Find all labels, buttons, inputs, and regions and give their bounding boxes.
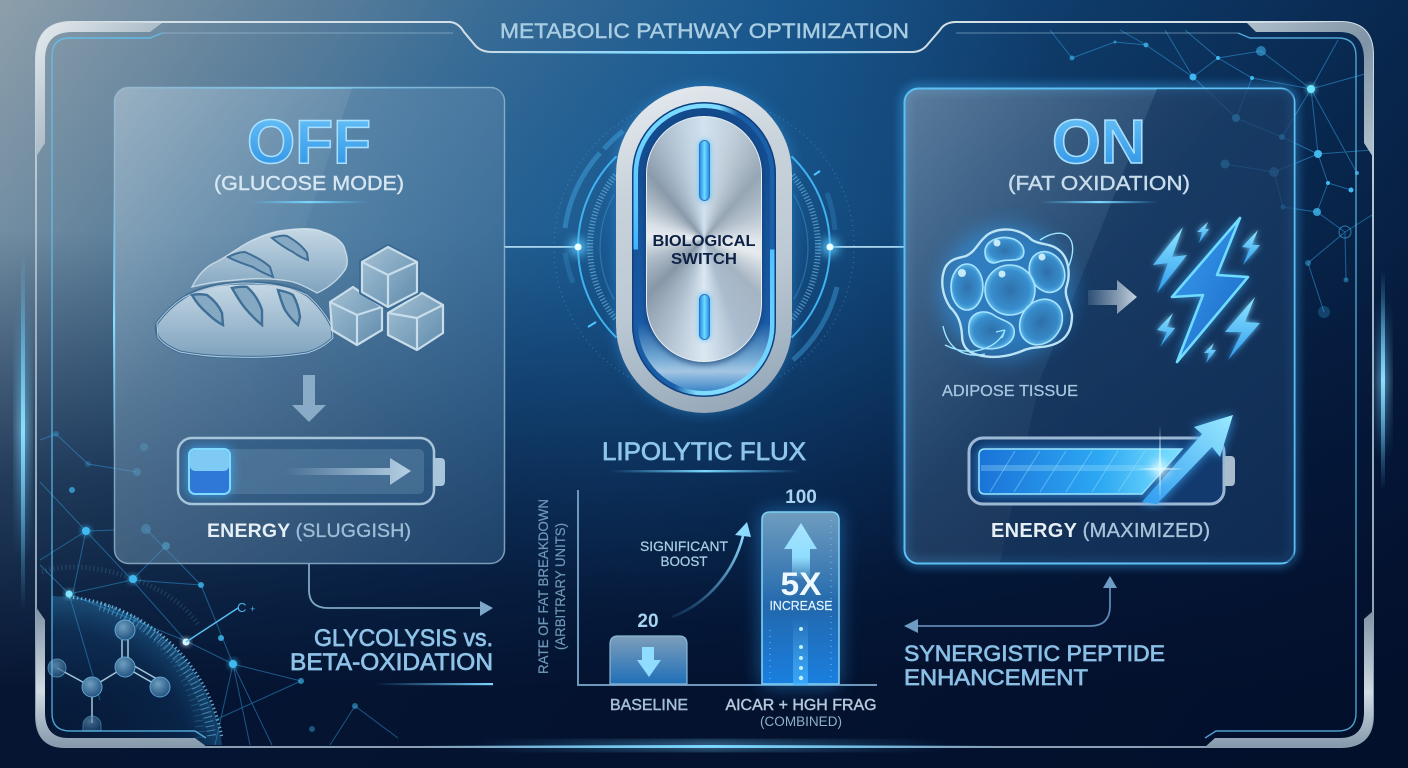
y axis label: (ARBITRARY UNITS) — [553, 523, 568, 650]
significant boost label: BOOST — [660, 553, 708, 569]
icon: molecule: + — [250, 604, 255, 614]
x label aicar + hgh frag: AICAR + HGH FRAG — [726, 697, 876, 714]
off heading: OFF — [247, 108, 371, 177]
bar: baseline — [610, 636, 687, 684]
on subtitle: (FAT OXIDATION) — [1008, 173, 1190, 195]
energy maximized label: ENERGY (MAXIMIZED) — [991, 520, 1210, 542]
switch: brushed knob — [646, 116, 762, 362]
title: METABOLIC PATHWAY OPTIMIZATION — [500, 19, 909, 43]
value 20: 20 — [637, 611, 659, 632]
glycolysis vs beta-oxidation label: GLYCOLYSIS vs. — [314, 625, 493, 652]
adipose tissue label: ADIPOSE TISSUE — [942, 383, 1078, 400]
arrow: cell to energy — [1088, 280, 1137, 314]
curve: significant boost — [672, 522, 751, 617]
axes — [578, 490, 877, 685]
off subtitle: (GLUCOSE MODE) — [214, 173, 404, 195]
5x increase label: 5X — [780, 566, 822, 602]
on heading: ON — [1052, 108, 1146, 177]
glycolysis vs beta-oxidation label — [290, 625, 493, 685]
icon: full battery — [969, 415, 1235, 504]
switch: glowing ring — [632, 102, 776, 397]
network nodes: bottom left — [53, 431, 358, 732]
y axis label — [536, 499, 568, 674]
panel: off glucose mode — [113, 87, 504, 564]
synergistic peptide enhancement label — [904, 641, 1165, 690]
5x increase label: INCREASE — [770, 598, 833, 613]
switch label — [652, 233, 756, 268]
switch: top indicator — [698, 140, 710, 201]
x sublabel combined: (COMBINED) — [760, 714, 842, 729]
lipolytic flux heading: LIPOLYTIC FLUX — [602, 438, 806, 466]
switch: silver bezel — [616, 86, 792, 413]
arrow: down to battery — [292, 375, 326, 422]
switch: inner well — [638, 108, 770, 391]
arrow: glycolysis connector — [309, 564, 493, 616]
frame: glow accents — [21, 250, 25, 610]
biological switch — [610, 80, 798, 420]
frame: bottom left corner piece — [36, 607, 207, 747]
synergistic peptide enhancement label: ENHANCEMENT — [904, 665, 1088, 690]
glycolysis vs beta-oxidation label: BETA-OXIDATION — [290, 649, 493, 676]
globe: bottom left — [42, 567, 222, 745]
panel background — [114, 88, 504, 564]
icon: low battery — [178, 438, 445, 504]
x label baseline: BASELINE — [610, 697, 688, 714]
switch label: BIOLOGICAL — [652, 233, 756, 250]
switch: surrounding rings — [504, 97, 904, 397]
5x increase label — [770, 566, 833, 613]
frame: top right corner piece — [1247, 22, 1373, 157]
icon: sugar cubes — [330, 247, 443, 350]
network nodes: top right — [1070, 40, 1359, 318]
panel background — [904, 88, 1294, 564]
bar chart: lipolytic flux — [536, 487, 877, 729]
network: top right decoration — [1050, 30, 1372, 312]
icon: adipose cell cluster — [940, 226, 1073, 358]
arrow: synergistic connector — [904, 576, 1117, 633]
frame: faint top inner lines — [162, 32, 1238, 34]
panel: on fat oxidation — [904, 88, 1294, 564]
synergistic peptide enhancement label: SYNERGISTIC PEPTIDE — [904, 641, 1165, 666]
switch: bottom indicator — [698, 294, 710, 340]
icon: bread loaves — [156, 229, 347, 357]
y axis label: RATE OF FAT BREAKDOWN — [536, 499, 551, 674]
icon: molecule: C — [237, 600, 246, 615]
value 100: 100 — [785, 487, 817, 508]
energy sluggish label: ENERGY (SLUGGISH) — [207, 520, 411, 542]
frame: top left corner piece — [36, 22, 162, 157]
panel glow — [904, 88, 1294, 563]
network: bottom left decoration — [40, 434, 398, 745]
icon: lightning bolts — [1153, 218, 1260, 363]
switch label: SWITCH — [671, 251, 737, 268]
bar: aicar + hgh frag — [762, 512, 839, 685]
significant boost label — [640, 538, 728, 569]
frame: bottom right corner piece — [1205, 611, 1373, 747]
icon: molecule — [48, 600, 255, 731]
significant boost label: SIGNIFICANT — [640, 538, 728, 554]
